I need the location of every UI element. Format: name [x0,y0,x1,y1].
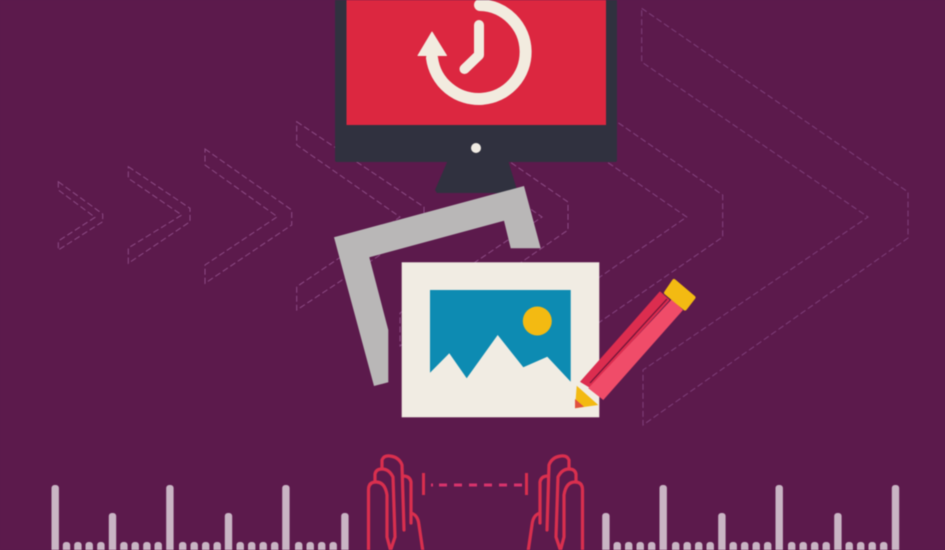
dashed measure between hands [424,473,526,495]
picture sky [430,290,571,382]
icon: clock with counter-clockwise arrow [418,5,526,99]
monitor stand [435,160,517,193]
dashed chevron arrows [58,8,908,425]
pencil centre line [590,299,667,383]
icon: pencil [575,281,694,408]
photo card [402,262,599,417]
pencil lead [575,399,584,408]
monitor [335,0,617,193]
left ruler [52,485,349,550]
left hand [368,456,423,550]
pencil dark stripe [581,292,669,387]
power button [471,143,481,153]
sun [523,306,552,336]
right hand [528,456,582,550]
right ruler [602,485,899,550]
monitor body [335,0,617,162]
pencil light stripe [588,299,683,400]
monitor screen [346,0,606,125]
picture frame behind card [334,186,541,386]
pencil tip [575,386,598,408]
pencil eraser cap [666,281,694,308]
